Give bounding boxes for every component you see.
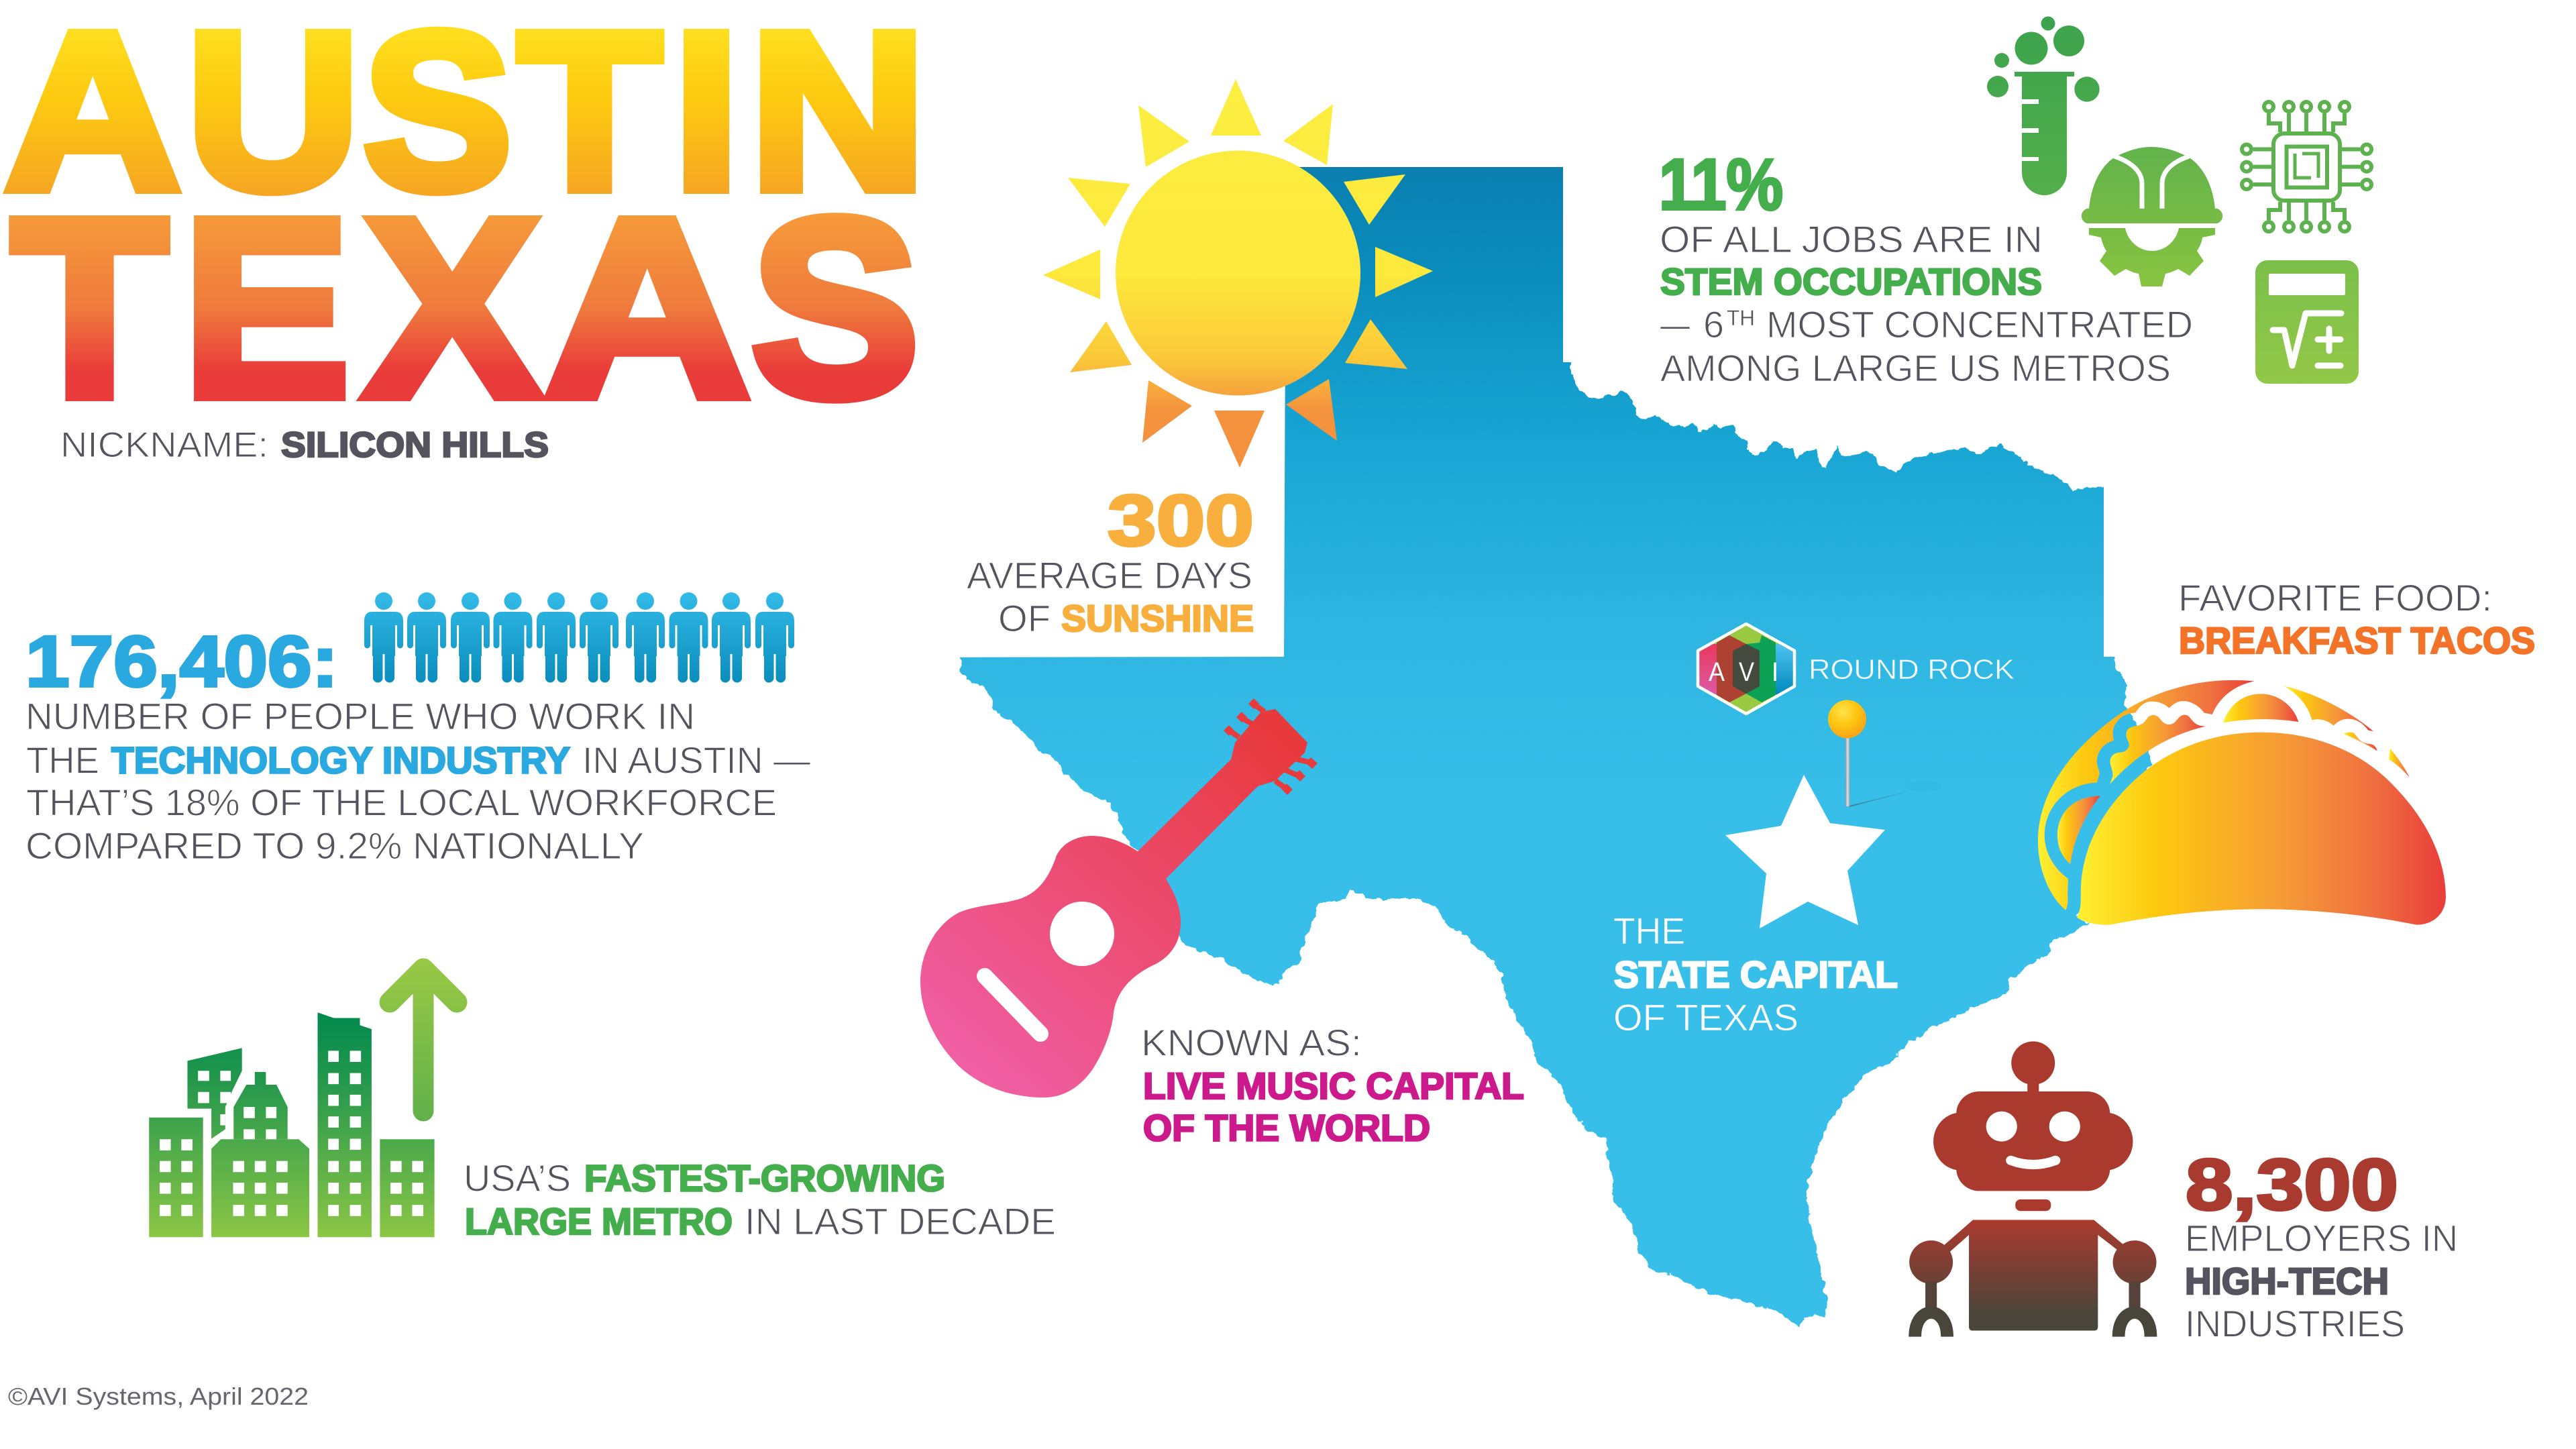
live music text block: KNOWN AS:	[1141, 1022, 1362, 1064]
logo: AVI hexagon: I	[1772, 657, 1778, 687]
taco shell right	[2284, 686, 2373, 731]
sunshine text block: OF	[998, 597, 1051, 639]
robot body and arms	[1909, 1220, 2157, 1331]
tech workers text block: THAT’S 18% OF THE LOCAL WORKFORCE	[26, 782, 777, 824]
state capital text block: OF TEXAS	[1613, 996, 1799, 1038]
heading line: TEXAS: X	[365, 167, 541, 449]
taco front shell	[2077, 733, 2446, 925]
icon: hard hat and gear	[2082, 147, 2222, 286]
sunshine text block: AVERAGE DAYS	[967, 554, 1252, 596]
taco back shell	[2038, 680, 2255, 910]
growth text block: LARGE METRO	[465, 1200, 733, 1242]
title: Austin Texas	[5, 0, 926, 449]
icon: test tube	[1987, 16, 2100, 195]
label: Round Rock: ROUND ROCK	[1809, 653, 2015, 685]
STEM text block: TH	[1727, 306, 1755, 330]
icon: sun	[1043, 79, 1433, 468]
STEM text block: OF ALL JOBS ARE IN	[1660, 218, 2043, 260]
growth text block: FASTEST-GROWING	[584, 1157, 945, 1199]
tech workers text block: COMPARED TO 9.2% NATIONALLY	[25, 824, 644, 867]
taco filling top	[2223, 694, 2298, 722]
tech workers text block	[25, 621, 810, 867]
tech workers text block: NUMBER OF PEOPLE WHO WORK IN	[25, 695, 695, 737]
number: 11%: 11%	[1659, 144, 1783, 225]
taco sliver right	[2389, 749, 2410, 777]
logo: AVI hexagon: V	[1739, 657, 1754, 687]
sunshine text block: SUNSHINE	[1061, 597, 1254, 639]
state capital text block: STATE CAPITAL	[1614, 953, 1898, 996]
taco filling left	[2057, 796, 2100, 864]
favorite food text block	[2178, 577, 2535, 661]
state capital text block: THE	[1613, 910, 1685, 952]
icon: map pin	[1828, 700, 1942, 807]
employers text block: EMPLOYERS IN	[2185, 1217, 2458, 1259]
STEM text block: MOST CONCENTRATED	[1766, 303, 2193, 345]
state capital text block	[1613, 910, 1898, 1038]
STEM text block: STEM OCCUPATIONS	[1660, 260, 2042, 303]
icon: row of people	[364, 592, 794, 683]
logo: AVI hexagon: A	[1709, 657, 1725, 687]
favorite food text block: BREAKFAST TACOS	[2179, 619, 2535, 661]
STEM text block: 6	[1703, 303, 1724, 345]
number: 176,406: 176,406:	[25, 621, 338, 702]
heading line: TEXAS: E	[183, 167, 350, 449]
heading line: AUSTIN	[5, 0, 926, 237]
robot head	[1933, 1041, 2133, 1211]
employers text block	[2185, 1144, 2458, 1345]
sunshine text block	[967, 480, 1254, 639]
nickname text: SILICON HILLS	[281, 425, 549, 465]
growth text block: IN LAST DECADE	[745, 1200, 1056, 1242]
live music text block: OF THE WORLD	[1143, 1107, 1430, 1149]
nickname text	[60, 425, 549, 465]
tech workers text block: TECHNOLOGY INDUSTRY	[111, 739, 570, 782]
icon: capital star	[1725, 775, 1885, 928]
heading line: TEXAS: T	[12, 167, 167, 449]
heading line: TEXAS: A	[545, 166, 749, 449]
growth text block	[464, 1157, 1056, 1242]
map of Texas	[960, 160, 2151, 1328]
icon: taco	[2038, 680, 2446, 925]
growth text block: USA’S	[464, 1157, 571, 1199]
tech workers text block: IN AUSTIN —	[582, 739, 810, 782]
STEM text block: AMONG LARGE US METROS	[1660, 347, 2171, 389]
number: 300: 300	[1108, 480, 1254, 561]
heading line: TEXAS	[12, 166, 919, 449]
employers text block: HIGH-TECH	[2185, 1260, 2389, 1302]
number: 8,300: 8,300	[2186, 1144, 2398, 1225]
taco lettuce right	[2344, 733, 2377, 751]
nickname text: NICKNAME:	[60, 425, 268, 465]
logo: AVI hexagon	[1698, 624, 1794, 714]
live music text block	[1141, 1022, 1524, 1149]
STEM text block: —	[1660, 303, 1690, 345]
copyright note: ©AVI Systems, April 2022	[8, 1383, 309, 1410]
live music text block: LIVE MUSIC CAPITAL	[1143, 1065, 1524, 1107]
icon: guitar	[920, 698, 1318, 1097]
heading line: TEXAS: S	[751, 166, 919, 449]
icon: city buildings	[149, 1012, 435, 1237]
favorite food text block: FAVORITE FOOD:	[2178, 577, 2492, 619]
STEM text block	[1659, 144, 2193, 389]
icon: circuit chip	[2242, 102, 2371, 231]
tech workers text block: THE	[26, 739, 99, 782]
taco lettuce	[2110, 715, 2206, 784]
icon: robot	[1909, 1041, 2157, 1337]
employers text block: INDUSTRIES	[2185, 1303, 2405, 1345]
arrow: growth up	[390, 969, 457, 1111]
icon: calculator	[2255, 260, 2359, 384]
